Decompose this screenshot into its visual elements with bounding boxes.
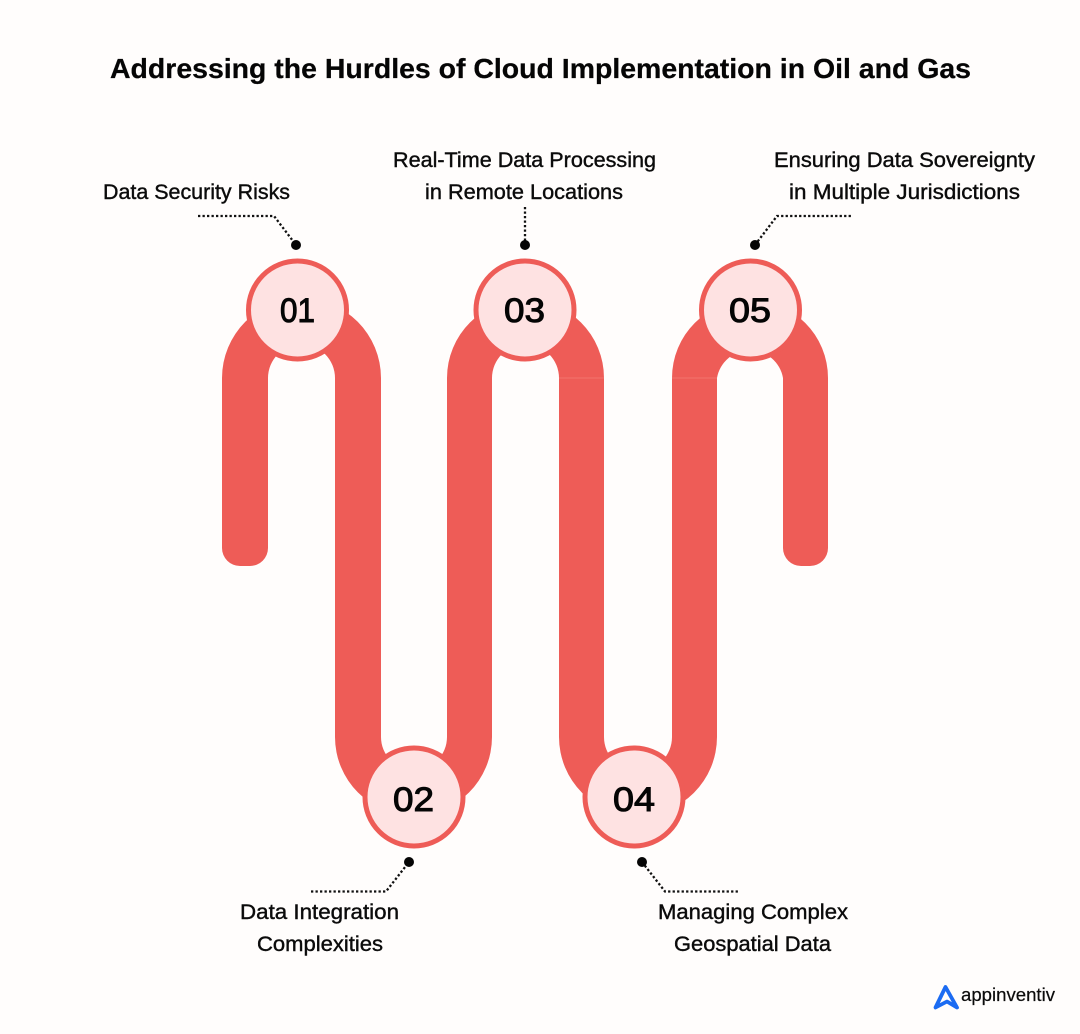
label 04: Managing Complex: [658, 901, 849, 924]
step 02: [365, 748, 463, 846]
step 03: [476, 261, 574, 359]
label 05: in Multiple Jurisdictions: [789, 181, 1020, 204]
leader 02: [311, 857, 414, 892]
step 01: 01: [280, 292, 315, 330]
leader 01: [198, 216, 301, 250]
label 03: Real-Time Data Processing: [393, 149, 656, 172]
label 03: [393, 149, 656, 204]
serpentine pipe: [222, 298, 828, 816]
label 05: Ensuring Data Sovereignty: [774, 149, 1036, 172]
title: Addressing the Hurdles of Cloud Implementation in Oil and Gas: [110, 53, 971, 84]
leader 03: [520, 207, 530, 250]
label 04: [658, 901, 849, 956]
leader 04: [637, 857, 740, 892]
step 04: [585, 748, 683, 846]
label 02: Complexities: [257, 933, 383, 956]
label 02: [240, 901, 399, 956]
logo: appinventiv: [936, 985, 1055, 1008]
logo: appinventiv: appinventiv: [961, 985, 1055, 1005]
step 05: [702, 261, 800, 359]
label 05: [774, 149, 1036, 204]
step 01: [248, 261, 346, 359]
step 02: 02: [393, 781, 434, 819]
label 04: Geospatial Data: [674, 933, 831, 956]
label 03: in Remote Locations: [425, 181, 623, 204]
leader 05: [750, 216, 853, 250]
step 05: 05: [729, 292, 771, 330]
step 04: 04: [613, 781, 655, 819]
step 03: 03: [504, 292, 545, 330]
label 01: Data Security Risks: [103, 181, 290, 204]
label 02: Data Integration: [240, 901, 399, 924]
